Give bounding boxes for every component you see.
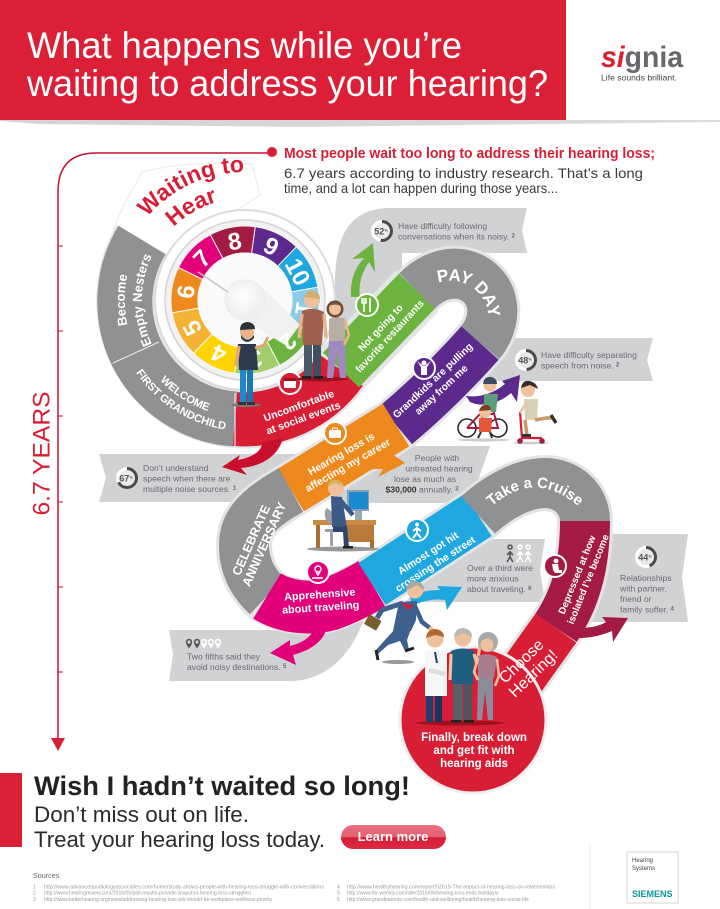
callout: 67 percent: 67 — [119, 474, 129, 484]
logo: signia: Life sounds brilliant. — [601, 72, 677, 82]
tagline — [34, 802, 325, 852]
sources: http://www.grandparents.com/health-and-wellbeing/health/hearing-loss-social-life — [347, 897, 529, 903]
arrow: maroon — [578, 617, 628, 642]
heading: wish I hadn't waited: Wish I hadn’t waited so long! — [34, 771, 410, 801]
heading: waiting to hear: Waiting to — [136, 158, 243, 214]
figure: doctor and couple — [416, 628, 504, 726]
arrow: green — [351, 243, 375, 297]
callout: 30000 annually: $30,000 annually. — [386, 484, 453, 494]
road label: celebrate anniversary: ANNIVERSARY — [240, 500, 289, 589]
callout: 67 percent: % — [129, 474, 133, 480]
figure: couple — [296, 291, 349, 382]
logo: siemens hearing systems: SIEMENS — [632, 889, 673, 899]
road outline — [244, 274, 585, 700]
intro text: 6.7 years according to industry research. That’s a long — [284, 165, 643, 181]
label: finally: Finally, break down — [421, 732, 527, 744]
title: waiting to address your hearing? — [26, 63, 548, 104]
logo: siemens hearing systems — [590, 845, 678, 909]
callout: 67 percent — [118, 463, 237, 494]
label: grandkids: away from me — [413, 363, 471, 418]
callout: 48 percent: 2 — [616, 362, 620, 368]
label: uncomfortable: Uncomfortable — [262, 388, 336, 424]
callout: 67 percent: speech when there are — [143, 474, 231, 484]
gauge wheel: 9 — [259, 232, 283, 262]
logo: siemens hearing systems: Hearing — [632, 858, 653, 864]
callout: two fifths: 5 — [283, 664, 287, 670]
icon: calendar — [279, 372, 301, 394]
icon: fork and knife — [356, 294, 378, 316]
gauge wheel: 6 — [172, 283, 201, 300]
sources: 6 — [337, 897, 340, 903]
callout: over a third: more anxious — [467, 574, 519, 584]
sources: http://www.betterhearing.org/news/addressing-hearing-loss-job-should-be-workplace-wellness-priority — [44, 897, 273, 903]
callout: 67 percent: 1 — [233, 486, 237, 492]
label: choose hearing: Choose — [496, 636, 548, 687]
label: grandkids: Grandkids are pulling — [391, 341, 475, 421]
arrow: magenta — [270, 626, 327, 665]
label: career: affecting my career — [303, 436, 393, 495]
gauge wheel: 7 — [188, 245, 217, 273]
button: learn more: Learn more — [358, 829, 428, 844]
sources: http://www.healthyhearing.com/report/52619-The-impact-of-hearing-loss-on-relationships — [347, 884, 555, 890]
label: uncomfortable: at social events — [265, 399, 342, 437]
callout: 67 percent: Don’t understand — [143, 463, 209, 473]
figure: bearded man — [231, 322, 268, 407]
sources: 3 — [33, 897, 36, 903]
road label: become empty nesters: Become — [118, 274, 128, 326]
label: career: Hearing loss is — [306, 430, 377, 478]
header shadow — [0, 120, 720, 127]
callout: 44 percent: with partner, — [619, 584, 667, 594]
title: What happens while you’re — [27, 25, 462, 66]
callout: 30000 annually — [386, 453, 473, 494]
icon: sad person — [544, 555, 566, 577]
header banner — [0, 0, 566, 120]
sources: Sources — [33, 871, 60, 880]
label: choose hearing: Hearing! — [506, 647, 561, 701]
callout: 48 percent: 48 — [518, 356, 528, 366]
callout: over a third — [467, 545, 533, 594]
sources: http://www.advancedaudiologyassociates.com/home/study-shows-people-with-hearing-loss-struggle-with-conversations — [44, 884, 324, 890]
icon: map pin — [307, 561, 329, 583]
arrow: orange — [345, 449, 405, 480]
road label: pay day: PAY DAY — [437, 269, 500, 316]
gauge wheel: 5 — [178, 315, 208, 340]
callout: 48 percent: % — [528, 356, 532, 362]
sources: 5 — [337, 890, 340, 896]
callout: 44 percent: Relationships — [620, 573, 672, 583]
callout: two fifths — [187, 640, 287, 672]
callout: 48 percent: speech from noise. — [541, 360, 614, 370]
sources: http://www.thr-weekly.com/site/2016/06/hearing-loss-ends-holidays/ — [347, 890, 499, 896]
callout: 52 percent: 52 — [374, 226, 384, 236]
label: crossing: crossing the street — [394, 535, 478, 595]
label: restaurants: favorite restaurants — [354, 298, 427, 375]
label: crossing: Almost got hit — [396, 530, 461, 578]
road label: take a cruise: Take a Cruise — [485, 478, 582, 505]
bottom accent bar — [0, 773, 22, 847]
callout: 44 percent: 4 — [670, 606, 674, 612]
callout: 67 percent: multiple noise sources. — [143, 484, 230, 494]
gauge wheel: 10 — [279, 254, 315, 290]
callout: 52 percent: Have difficulty following — [398, 221, 487, 231]
callout: 52 percent — [372, 221, 516, 242]
step labels — [260, 290, 612, 770]
arrow: blue — [410, 586, 462, 610]
logo: signia: signia — [601, 41, 683, 74]
gauge wheel: 3 — [246, 344, 264, 373]
sources: http://www.hearingreview.com/2016/05/poll-results-provide-snapshot-hearing-loss-struggles/ — [44, 890, 252, 896]
label: finally: and get fit with — [433, 745, 515, 757]
label: restaurants: Not going to — [357, 303, 406, 354]
tagline: Treat your hearing loss today. — [34, 827, 325, 852]
callout: over a third: 6 — [528, 586, 532, 592]
6.7 years label: 6.7 YEARS — [28, 392, 56, 516]
road label: become empty nesters: Empty Nesters — [132, 254, 152, 347]
heading: waiting to hear: Hear — [164, 190, 214, 226]
sources: 1 — [33, 884, 36, 890]
label: depressed: isolated I’ve become — [566, 533, 612, 626]
callout: 30000 annually: untreated hearing — [405, 464, 473, 474]
arrow: red — [222, 438, 283, 475]
gauge wheel: 8 — [226, 227, 244, 256]
timeline: 6.7 years — [28, 147, 277, 751]
callout: 44 percent: friend or — [620, 594, 652, 604]
gauge wheel: 4 — [207, 338, 231, 368]
panel: final red circle — [400, 647, 546, 793]
figure: kids on bike — [458, 377, 510, 442]
callout: 30000 annually: lose as much as — [394, 474, 456, 484]
label: apprehensive: Apprehensive — [284, 587, 356, 603]
callout: 52 percent: 2 — [512, 234, 516, 240]
road outline ring — [126, 240, 417, 419]
intro text: Most people wait too long to address their hearing loss; — [284, 146, 655, 162]
callout: over a third: Over a third were — [467, 563, 533, 573]
sources — [33, 871, 555, 903]
callout: over a third: about traveling. — [467, 584, 526, 594]
callout: 48 percent — [516, 350, 637, 370]
intro text: time, and a lot can happen during those years... — [284, 180, 558, 196]
callout: 30000 annually: People with — [415, 453, 459, 463]
callout banner shapes — [99, 208, 688, 681]
sources: 4 — [337, 884, 340, 890]
icon: family person — [413, 357, 435, 379]
gauge wheel — [155, 210, 335, 390]
callout: 52 percent: conversations when its noisy. — [398, 232, 509, 242]
arrows — [222, 243, 628, 665]
callout: 30000 annually: 3 — [455, 486, 459, 492]
logo: siemens hearing systems: Systems — [632, 866, 655, 872]
button: learn more — [341, 825, 446, 849]
callout: 52 percent: % — [384, 228, 388, 232]
icon: pedestrian — [406, 519, 428, 541]
icon: briefcase — [324, 422, 346, 444]
figure: man at desk — [307, 480, 379, 552]
label: finally: hearing aids — [440, 758, 508, 770]
callout: 48 percent: Have difficulty separating — [541, 350, 637, 360]
callout: 44 percent — [619, 548, 674, 614]
road label: celebrate anniversary: CELEBRATE — [230, 503, 273, 578]
figure: kid on scooter — [513, 381, 556, 444]
road segments — [125, 240, 585, 700]
callout: two fifths: avoid noisy destinations. — [187, 662, 281, 672]
callout: 44 percent: family suffer. — [620, 604, 668, 614]
road label: welcome first grandchild: FIRST GRANDCHILD — [136, 368, 226, 429]
gauge wheel: 2 — [273, 327, 302, 355]
label: depressed: Depressed at how — [557, 534, 599, 616]
figure: running man — [364, 581, 434, 664]
road label: welcome first grandchild: WELCOME — [161, 375, 210, 411]
callout: 44 percent: % — [648, 554, 652, 558]
panel: waiting to hear start tab — [113, 163, 260, 255]
callout: two fifths: Two fifths said they — [187, 652, 261, 662]
callout: 44 percent: 44 — [638, 552, 648, 562]
gauge wheel: 1 — [289, 300, 318, 317]
sources: 2 — [33, 890, 36, 896]
arrow: purple — [466, 375, 520, 405]
tagline: Don’t miss out on life. — [34, 802, 249, 827]
label: apprehensive: about traveling — [282, 599, 360, 617]
road label: become empty nesters — [118, 254, 152, 347]
intro text — [284, 146, 655, 196]
